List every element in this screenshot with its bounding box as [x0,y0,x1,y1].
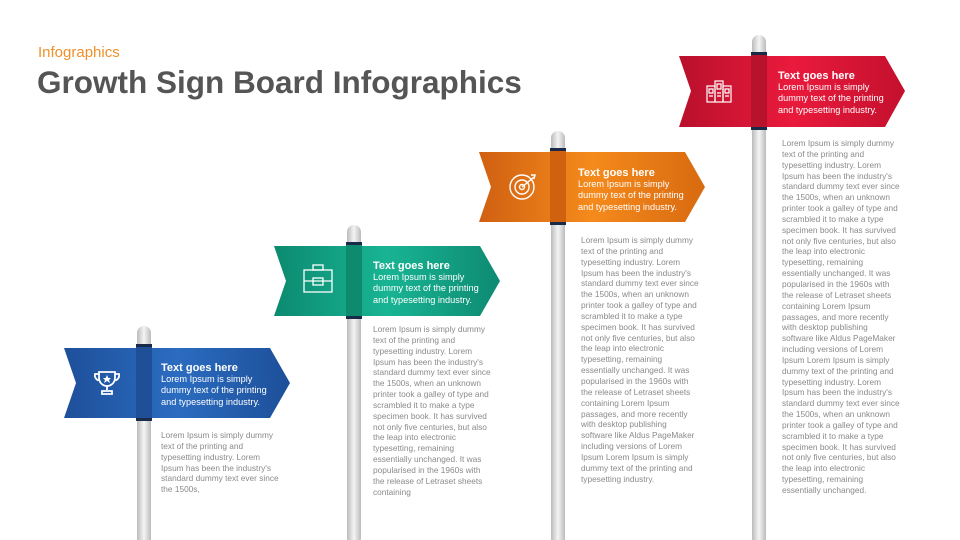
description 3: essentially unchanged. It was [581,365,689,375]
sign text 1 [161,362,267,407]
description 2: printer took a galley of type and [373,389,489,399]
description 3: passages, and more recently [581,408,688,418]
description 4: the release of Letraset sheets [782,290,891,300]
description 2: essentially unchanged. It was [373,454,481,464]
sign text 3 [578,167,684,212]
description 4: printer took a galley of type and [782,420,898,430]
description 4: the leap into electronic [782,463,865,473]
description 4: the leap into electronic [782,246,865,256]
description 1: Ipsum has been the industry's [161,463,271,473]
icon: target [510,175,535,199]
description 3 [581,235,699,484]
sign text 4: Lorem Ipsum is simply [778,82,869,92]
description 3: Ipsum has been the industry's [581,268,691,278]
description 3: including versions of Lorem [581,441,682,451]
sign text 4 [778,70,884,115]
description 3: software like Aldus PageMaker [581,430,694,440]
description 4: not only five centuries, but also [782,236,896,246]
description 3: typesetting, remaining [581,354,662,364]
description 4: standard dummy text ever since [782,181,900,191]
description 4 [782,138,900,495]
sign text 3: dummy text of the printing [578,190,684,200]
sign text 1: dummy text of the printing [161,385,267,395]
description 3: scrambled it to make a type [581,311,682,321]
description 4: containing Lorem Ipsum [782,301,871,311]
description 3: typesetting industry. [581,474,654,484]
description 2: Ipsum has been the industry's [373,357,483,367]
description 4: printer took a galley of type and [782,203,898,213]
description 1: text of the printing and [161,441,243,451]
description 4: specimen book. It has survived [782,442,896,452]
description 2 [373,324,491,497]
sign text 2: dummy text of the printing [373,283,479,293]
icon: trophy [95,372,119,394]
description 4: Ipsum Lorem Ipsum is simply [782,355,889,365]
sign 2 green [274,225,500,540]
description 1: standard dummy text ever since [161,473,279,483]
description 4: scrambled it to make a type [782,214,883,224]
description 2: specimen book. It has survived [373,411,487,421]
description 4: essentially unchanged. [782,485,866,495]
description 4: Lorem Ipsum is simply dummy [782,138,894,148]
title: Growth Sign Board Infographics [37,64,522,100]
sign text 2: Text goes here [373,260,450,272]
description 2: standard dummy text ever since [373,367,491,377]
description 2: the 1500s, when an unknown [373,378,481,388]
description 2: typesetting industry. Lorem [373,346,472,356]
description 4: Ipsum has been the industry's [782,387,892,397]
description 4: specimen book. It has survived [782,225,896,235]
description 4: the 1500s, when an unknown [782,192,890,202]
icon: briefcase [304,265,332,292]
description 2: typesetting, remaining [373,443,454,453]
sign text 3: Lorem Ipsum is simply [578,179,669,189]
description 2: not only five centuries, but also [373,422,487,432]
description 4: typesetting industry. Lorem [782,377,881,387]
description 3: text of the printing and [581,246,663,256]
description 4: standard dummy text ever since [782,398,900,408]
icon: buildings [707,81,731,102]
description 4: the 1500s, when an unknown [782,409,890,419]
description 1: Lorem Ipsum is simply dummy [161,430,273,440]
sign text 3: and typesetting industry. [578,202,677,212]
description 3: printer took a galley of type and [581,300,697,310]
description 3: dummy text of the printing and [581,463,693,473]
sign text 2: Lorem Ipsum is simply [373,272,464,282]
description 4: typesetting, remaining [782,474,863,484]
description 4: dummy text of the printing and [782,366,894,376]
sign text 4: dummy text of the printing [778,93,884,103]
description 3: standard dummy text ever since [581,278,699,288]
sign 3 orange [479,131,705,540]
description 4: scrambled it to make a type [782,431,883,441]
subtitle: Infographics [38,44,120,61]
sign 1 blue [64,326,290,540]
sign text 3: Text goes here [578,167,655,179]
sign text 2: and typesetting industry. [373,295,472,305]
sign 4 red [679,35,905,540]
description 4: popularised in the 1960s with [782,279,889,289]
description 1: the 1500s, [161,484,200,494]
sign text 1: Lorem Ipsum is simply [161,374,252,384]
description 4: software like Aldus PageMaker [782,333,895,343]
description 4: text of the printing and [782,149,864,159]
description 3: specimen book. It has survived [581,322,695,332]
sign text 1: Text goes here [161,362,238,374]
description 3: the 1500s, when an unknown [581,289,689,299]
description 2: containing [373,487,411,497]
description 3: with desktop publishing [581,419,667,429]
description 2: the leap into electronic [373,432,456,442]
description 2: popularised in the 1960s with [373,465,480,475]
description 4: passages, and more recently [782,312,889,322]
sign text 4: Text goes here [778,70,855,82]
description 4: including versions of Lorem [782,344,883,354]
description 3: not only five centuries, but also [581,333,695,343]
description 4: with desktop publishing [782,322,868,332]
description 3: the leap into electronic [581,343,664,353]
description 3: containing Lorem Ipsum [581,398,670,408]
description 1: typesetting industry. Lorem [161,452,260,462]
description 4: typesetting industry. Lorem [782,160,881,170]
description 4: essentially unchanged. It was [782,268,890,278]
description 1 [161,430,279,494]
sign text 4: and typesetting industry. [778,105,877,115]
description 2: Lorem Ipsum is simply dummy [373,324,485,334]
description 2: scrambled it to make a type [373,400,474,410]
sign text 2 [373,260,479,305]
description 3: Ipsum Lorem Ipsum is simply [581,452,688,462]
description 4: Ipsum has been the industry's [782,171,892,181]
description 4: not only five centuries, but also [782,452,896,462]
description 4: typesetting, remaining [782,257,863,267]
description 2: text of the printing and [373,335,455,345]
description 3: popularised in the 1960s with [581,376,688,386]
description 3: Lorem Ipsum is simply dummy [581,235,693,245]
description 2: the release of Letraset sheets [373,476,482,486]
description 3: the release of Letraset sheets [581,387,690,397]
sign text 1: and typesetting industry. [161,397,260,407]
description 3: typesetting industry. Lorem [581,257,680,267]
